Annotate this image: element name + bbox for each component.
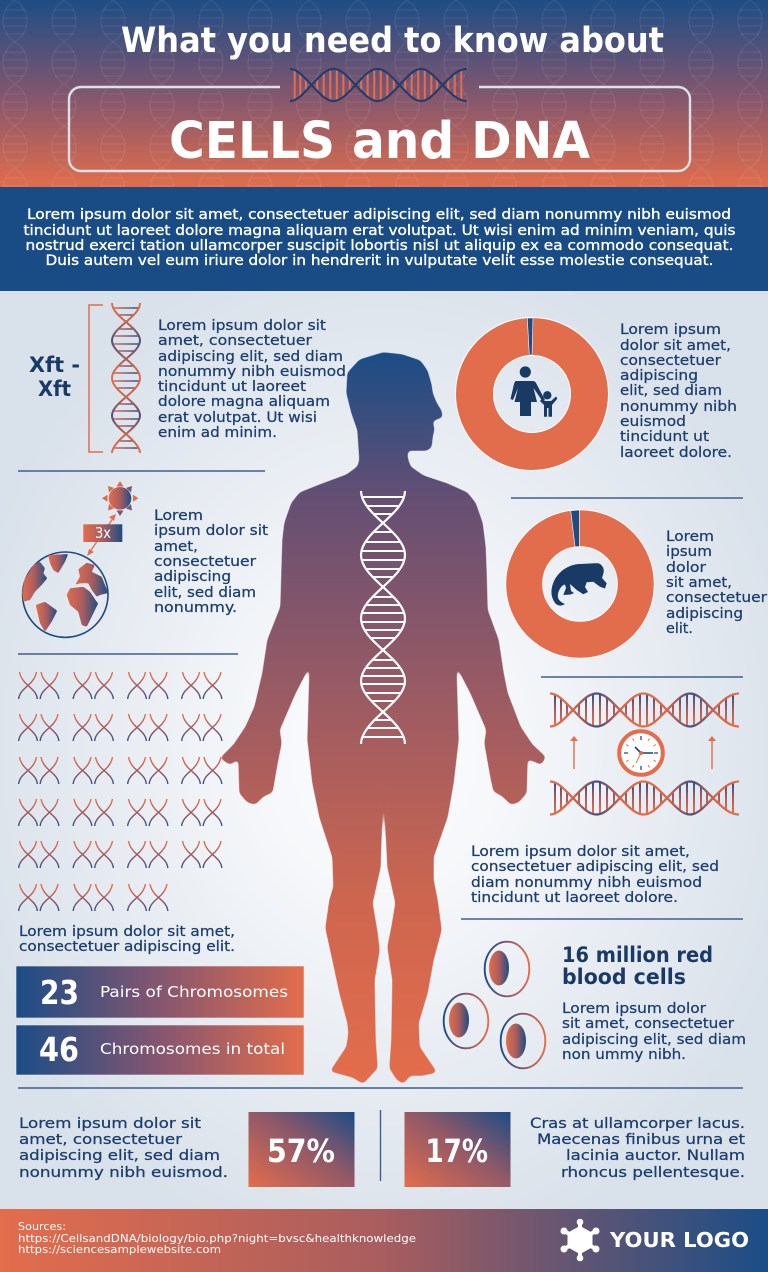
text block: sources: Sources: [18, 1220, 66, 1233]
text block: left statistic: amet, consectetuer [19, 1132, 182, 1148]
stat: 23 pairs [16, 966, 304, 1018]
panel: intro text: Lorem ipsum dolor sit amet, consectetuer adipiscing elit, sed diam nonummy nibh euismod [27, 207, 731, 223]
text block: family: tincidunt ut [620, 429, 710, 445]
text block: right statistic: rhoncus pellentesque. [561, 1165, 745, 1181]
icon grid: chromosome pairs [19, 672, 222, 911]
text block: earth: adipiscing [154, 569, 231, 585]
text block: blood cells: non ummy nibh. [562, 1047, 686, 1063]
text block: right statistic: Maecenas finibus urna et [537, 1132, 746, 1148]
text block: blood cells: sit amet, consectetuer [562, 1016, 734, 1032]
text block: family: euismod [620, 414, 686, 430]
text block: blood cells: adipiscing elit, sed diam [562, 1032, 746, 1048]
stat: 23 pairs: Pairs of Chromosomes [100, 983, 288, 1001]
icon: globe [22, 552, 108, 637]
icon: header dna [290, 69, 467, 101]
text block: replication: consectetuer adipiscing elit, sed [471, 859, 719, 875]
text block: right statistic: Cras at ullamcorper lacus. [530, 1116, 745, 1132]
text block: blood cells: Lorem ipsum dolor [562, 1001, 706, 1017]
text block: earth: nonummy. [154, 600, 237, 616]
icon: blood cell left [444, 994, 488, 1048]
stat: 46 chromosomes: 46 [39, 1030, 79, 1069]
text block: family: Lorem ipsum [620, 322, 721, 338]
arrow: sun to earth [87, 514, 116, 556]
icon: clock [619, 731, 663, 775]
label: xft range: Xft - [29, 353, 80, 377]
text block: dna length [158, 318, 346, 441]
icon: monkey [551, 563, 607, 606]
icon: dna strand bottom [550, 782, 739, 814]
text block: replication: Lorem ipsum dolor sit amet, [471, 844, 690, 860]
text block: left statistic: nonummy nibh euismod. [19, 1165, 228, 1181]
panel: donut human [474, 318, 737, 461]
label: 3x: 3x [95, 524, 111, 542]
icon: dna strand top [550, 694, 739, 726]
text block: monkey: adipiscing [666, 606, 743, 622]
text block: dna length: enim ad minim. [158, 425, 277, 441]
text block: dna length: dolore magna aliquam [158, 394, 330, 410]
text block: earth: amet, [154, 539, 198, 555]
stat: 57 percent: 57% [267, 1132, 335, 1170]
text block: monkey: dolor [666, 560, 706, 576]
panel: chromosomes [16, 672, 304, 1075]
human body silhouette [221, 353, 545, 1083]
panel: earth and sun [22, 481, 269, 637]
text block: chromosomes [19, 924, 235, 955]
text block: earth: elit, sed diam [154, 585, 256, 601]
text block: family: consectetuer [620, 353, 721, 369]
panel: footer [0, 1209, 768, 1272]
icon: mother and child [510, 366, 558, 417]
text block: family: laoreet dolore. [620, 445, 732, 461]
text block: right statistic: lacinia auctor. Nullam [566, 1148, 745, 1164]
heading: 16 million red blood cells: blood cells [562, 965, 686, 989]
stat: 23 pairs: 23 [40, 973, 79, 1012]
text block: chromosomes: Lorem ipsum dolor sit amet, [19, 924, 235, 940]
panel: header banner [0, 0, 768, 187]
text block: dna length: adipiscing elit, sed diam [158, 349, 343, 365]
panel: bottom statistics [19, 1110, 746, 1187]
bracket [89, 305, 103, 452]
title frame [69, 87, 690, 171]
page background [0, 291, 768, 1209]
text block: right statistic [530, 1116, 746, 1181]
text block: sources: https://sciencesamplewebsite.com [18, 1243, 221, 1256]
text block: left statistic: Lorem ipsum dolor sit [19, 1116, 202, 1132]
text block: replication: tincidunt ut laoreet dolore. [471, 890, 678, 906]
panel: height of dna [29, 303, 346, 453]
panel: intro text: nostrud exerci tation ullamcorper suscipit lobortis nisl ut aliquip ex ea commodo consequat. [26, 238, 734, 254]
icon: blood cell right [501, 1014, 545, 1068]
text block: sources: https://CellsandDNA/biology/bio.php?night=bvsc&healthknowledge [18, 1232, 416, 1245]
text block: earth [154, 508, 269, 616]
text block: family: elit, sed diam [620, 383, 722, 399]
text block: sources [18, 1220, 416, 1256]
donut chart: monkey [524, 510, 636, 640]
text block: monkey: sit amet, [666, 575, 732, 591]
text block: monkey: Lorem [666, 529, 714, 545]
label: 3x [83, 524, 122, 542]
text block: replication [471, 844, 719, 906]
panel: intro text: tincidunt ut laoreet dolore magna aliquam erat volutpat. Ut wisi enim ad minim veniam, quis [24, 223, 736, 239]
text: your logo: YOUR LOGO [609, 1228, 749, 1252]
panel: dna replication [471, 694, 739, 906]
stat: 17 percent [404, 1112, 510, 1187]
heading: 16 million red blood cells: 16 million red [562, 943, 713, 967]
panel: intro text [0, 187, 768, 291]
text block: earth: Lorem [154, 508, 203, 524]
text block: left statistic: adipiscing elit, sed diam [19, 1148, 220, 1164]
text block: family [620, 322, 737, 461]
icon: logo molecule [561, 1219, 599, 1261]
text block: chromosomes: consectetuer adipiscing elit. [19, 939, 235, 955]
text block: monkey: consectetuer [666, 590, 767, 606]
label: xft range: Xft [38, 377, 71, 401]
text block: family: nonummy nibh [620, 399, 737, 415]
text block: family: dolor sit amet, [620, 338, 731, 354]
text block: dna length: Lorem ipsum dolor sit [158, 318, 327, 334]
text block: monkey: ipsum [666, 544, 712, 560]
label: xft range [29, 353, 80, 401]
text block: blood cells [562, 1001, 746, 1063]
stat: 57 percent [248, 1112, 354, 1187]
heading: what you need to know about: What you need to know about [121, 21, 664, 61]
icon: sun [102, 481, 138, 516]
text block: dna length: erat volutpat. Ut wisi [158, 410, 317, 426]
text block: dna length: amet, consectetuer [158, 333, 312, 349]
text block: replication: diam nonummy nibh euismod [471, 875, 702, 891]
icon: vertical dna helix [112, 303, 140, 453]
icon: blood cell top [485, 942, 529, 996]
panel: donut monkey [524, 510, 767, 640]
donut chart: family [474, 318, 590, 452]
stat: 17 percent: 17% [426, 1132, 488, 1170]
text block: monkey: elit. [666, 621, 693, 637]
panel: red blood cells [444, 942, 746, 1068]
text block: left statistic [19, 1116, 228, 1181]
stat: 46 chromosomes [16, 1025, 304, 1075]
arrow: left up [570, 736, 578, 769]
text block: monkey [666, 529, 767, 637]
icon: central white dna helix [361, 491, 405, 744]
text block: earth: ipsum dolor sit [154, 523, 269, 539]
title: cells and dna: CELLS and DNA [169, 112, 590, 171]
heading: 16 million red blood cells [562, 943, 713, 989]
text block: earth: consectetuer [154, 554, 256, 570]
text block: family: adipiscing [620, 368, 698, 384]
text block: dna length: nonummy nibh euismod [158, 364, 346, 380]
arrow: right up [708, 736, 716, 769]
stat: 46 chromosomes: Chromosomes in total [100, 1040, 285, 1058]
text block: dna length: tincidunt ut laoreet [158, 379, 307, 395]
panel: intro text: Duis autem vel eum iriure dolor in hendrerit in vulputate velit esse molestie consequat. [46, 253, 714, 269]
